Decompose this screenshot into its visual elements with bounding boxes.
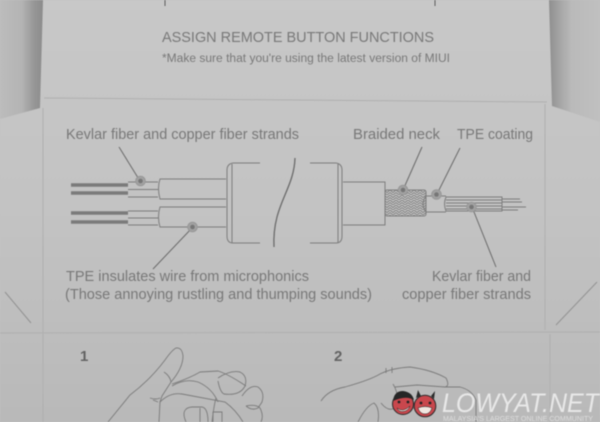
label: TPE insulation — [65, 269, 372, 303]
illustration: hand 1 — [108, 348, 263, 422]
left connector — [227, 163, 260, 243]
leader: left kevlar — [119, 147, 145, 186]
left lower cable — [71, 207, 226, 227]
right top flap shadow — [549, 0, 600, 122]
cut mark — [274, 158, 295, 247]
watermark logo — [392, 388, 600, 422]
illustration: hand 2 — [321, 367, 476, 422]
step number 1: 1 — [80, 348, 88, 365]
icon: red mascot left — [392, 391, 414, 414]
top panel tick marks — [165, 0, 435, 6]
label: TPE insulation: TPE insulates wire from microphonics — [66, 269, 309, 285]
leader: right kevlar — [467, 202, 496, 267]
label: TPE coating: TPE coating — [457, 127, 533, 143]
leader: TPE insulation — [153, 222, 197, 269]
leader: TPE coating — [432, 148, 460, 199]
label: right kevlar — [402, 269, 531, 303]
TPE coating section — [423, 196, 446, 212]
fibre strands — [444, 197, 526, 211]
left top flap shadow — [0, 0, 43, 119]
panel fold lines — [0, 98, 600, 422]
label: left kevlar: Kevlar fiber and copper fiber strands — [66, 127, 299, 143]
leader lines and markers — [119, 147, 496, 269]
heading: ASSIGN REMOTE BUTTON FUNCTIONS — [162, 29, 434, 46]
step number 2: 2 — [334, 348, 342, 365]
icon: red mascot right — [414, 390, 436, 417]
label: right kevlar: Kevlar fiber and — [432, 269, 531, 285]
label: braided neck: Braided neck — [353, 127, 441, 143]
cable diagram — [71, 158, 526, 247]
subheading note: *Make sure that you're using the latest version of MIUI — [162, 53, 450, 65]
neck — [343, 182, 385, 225]
label: TPE insulation: (Those annoying rustling and thumping sounds) — [65, 287, 372, 303]
braided section — [385, 190, 426, 216]
label: right kevlar: copper fiber strands — [402, 287, 531, 303]
leader: braided neck — [398, 147, 422, 195]
left upper cable — [71, 179, 226, 199]
right connector — [310, 163, 342, 243]
